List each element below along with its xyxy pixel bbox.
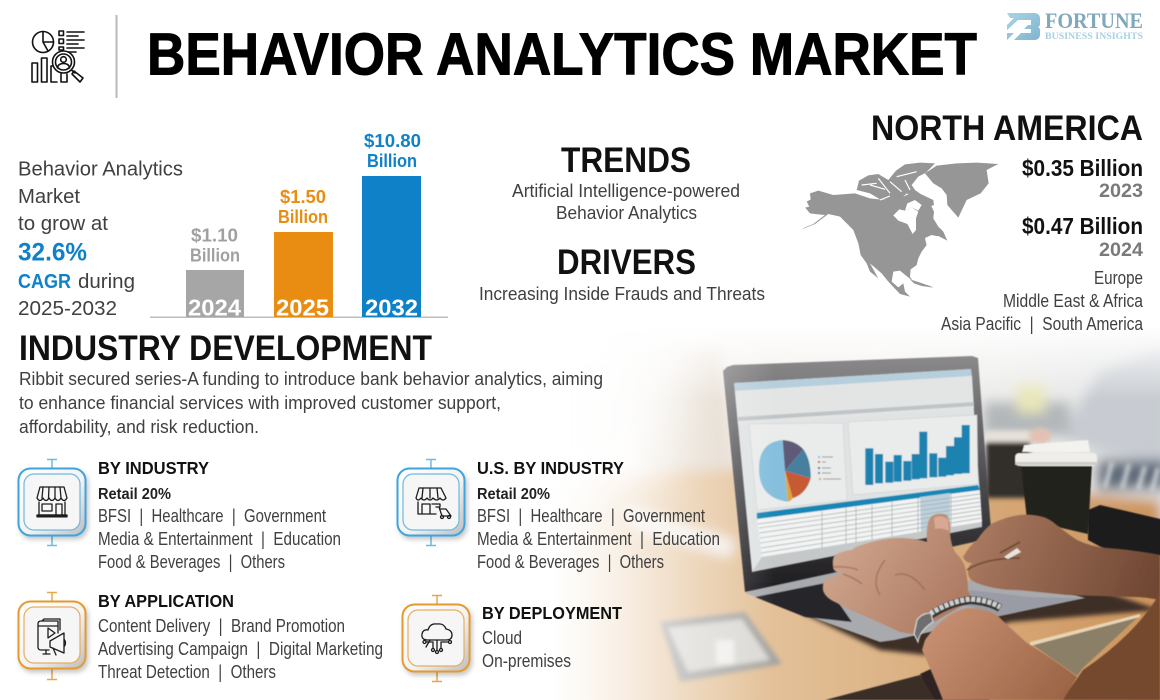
Arctic islands [857, 163, 935, 207]
Cuba [910, 279, 933, 288]
U.S. by industry: U.S. BY INDUSTRY [477, 458, 624, 478]
regional figures: $0.47 Billion [1022, 213, 1143, 239]
map: North America [802, 163, 998, 297]
bar 2024: 2024 [188, 294, 241, 320]
pie legend [818, 456, 841, 480]
by deployment [482, 603, 622, 671]
trends: Behavior Analytics [556, 203, 697, 223]
hands and forearms [823, 514, 1160, 700]
drivers: DRIVERS [557, 243, 696, 282]
trends: Artificial Intelligence-powered [512, 181, 740, 201]
by industry: Media & Entertainment | Education [98, 529, 341, 549]
U.S. by industry: Food & Beverages | Others [477, 552, 664, 572]
dark notebook [1088, 505, 1160, 556]
CAGR text block: Market [18, 185, 80, 208]
regional figures: 2024 [1099, 240, 1143, 261]
white gap in far hand [1004, 548, 1021, 559]
Arctic channels [862, 172, 917, 200]
bar chart: market size [150, 131, 448, 320]
U.S. by industry [477, 458, 720, 572]
CAGR text block [18, 158, 183, 320]
pie chart [759, 440, 811, 502]
Foxe channel [905, 200, 922, 211]
title: BEHAVIOR ANALYTICS MARKET [147, 22, 977, 88]
by deployment: BY DEPLOYMENT [482, 603, 622, 623]
by industry: BY INDUSTRY [98, 458, 209, 478]
header icon: analytics [32, 31, 84, 82]
regional figures: Middle East & Africa [1003, 291, 1144, 311]
by deployment: Cloud [482, 628, 522, 648]
phone on desk [660, 612, 782, 682]
bottom-right forearm [1062, 593, 1160, 700]
laptop screen bezel [723, 356, 992, 592]
logo: Fortune Business Insights [1007, 8, 1143, 42]
Greenland [925, 163, 998, 218]
header divider [116, 15, 118, 98]
by industry [98, 458, 341, 572]
icon: video and megaphone [18, 592, 86, 680]
bar chart [865, 425, 970, 485]
logo: Fortune Business Insights: BUSINESS INSIGHTS [1045, 32, 1143, 42]
back coffee cup [985, 428, 1051, 498]
drivers: Increasing Inside Frauds and Threats [479, 284, 765, 304]
spreadsheet chart panels [749, 423, 847, 510]
bar 2032: $10.80 [364, 131, 421, 151]
regional figures: 2023 [1099, 181, 1143, 202]
bar 2032 [362, 131, 421, 320]
by deployment: On-premises [482, 651, 571, 671]
drivers [479, 243, 765, 304]
CAGR text block: 32.6% [18, 238, 87, 266]
industry development: INDUSTRY DEVELOPMENT [19, 329, 432, 368]
CAGR text block: during [78, 270, 135, 293]
U.S. by industry: Media & Entertainment | Education [477, 529, 720, 549]
left fade [480, 285, 776, 700]
bar 2025: Billion [278, 207, 328, 227]
Hudson Bay [893, 207, 918, 234]
background photo: laptop on desk [480, 285, 1160, 700]
industry development: Ribbit secured series-A funding to introduce bank behavior analytics, aiming [19, 369, 603, 389]
icon: cloud network [402, 596, 470, 682]
desk edge and dark gap [825, 614, 1140, 700]
U.S. by industry: BFSI | Healthcare | Government [477, 506, 705, 526]
CAGR text block: to grow at [18, 212, 108, 235]
wristwatch bracelet [914, 599, 1000, 642]
spreadsheet screen [734, 369, 982, 572]
laptop base and keyboard [745, 553, 1085, 642]
thumbnail [934, 516, 949, 531]
sheet tabs strip [752, 522, 982, 572]
industry development: affordability, and risk reduction. [19, 417, 259, 437]
bar 2025: $1.50 [280, 187, 326, 207]
CAGR text block: CAGR [18, 270, 71, 293]
logo: Fortune Business Insights: FORTUNE [1045, 8, 1143, 33]
mainland [802, 191, 947, 297]
by application: Content Delivery | Brand Promotion [98, 616, 345, 636]
coffee cup [1015, 440, 1097, 534]
laptop shadow on desk [800, 590, 1160, 655]
bar 2025 [274, 187, 333, 320]
bar 2024: $1.10 [191, 226, 238, 246]
by application: Advertising Campaign | Digital Marketing [98, 639, 383, 659]
regional figures: NORTH AMERICA [871, 109, 1143, 148]
bar 2024: Billion [190, 246, 240, 266]
regional figures: $0.35 Billion [1022, 155, 1143, 181]
regional figures: Europe [1094, 268, 1143, 288]
far hand [963, 515, 1160, 600]
bar 2025: 2025 [276, 294, 329, 320]
near hand [823, 514, 972, 634]
U.S. by industry: Retail 20% [477, 486, 550, 503]
industry development [19, 329, 603, 437]
bar 2032: Billion [367, 151, 417, 171]
Alaska white cut [804, 202, 809, 208]
top fade [480, 285, 1160, 403]
by application: Threat Detection | Others [98, 662, 276, 682]
bar 2032: 2032 [365, 294, 418, 320]
by application: BY APPLICATION [98, 591, 234, 611]
icon: shop with cart [398, 460, 464, 546]
icon: storefront [18, 460, 86, 546]
regional figures [871, 109, 1144, 334]
by industry: BFSI | Healthcare | Government [98, 506, 326, 526]
industry development: to enhance financial services with improved customer support, [19, 393, 501, 413]
by application [98, 591, 383, 682]
data table [757, 490, 982, 557]
chair stripes [1105, 462, 1158, 491]
bar 2024 [186, 226, 244, 320]
CAGR text block: Behavior Analytics [18, 158, 183, 180]
CAGR text block: 2025-2032 [18, 297, 117, 320]
by industry: Food & Beverages | Others [98, 552, 285, 572]
blurred cafe background [530, 320, 1160, 700]
by industry: Retail 20% [98, 486, 171, 503]
trends [512, 141, 740, 223]
Gulf of St Lawrence [925, 235, 939, 240]
trends: TRENDS [561, 141, 691, 180]
near forearm [922, 608, 1077, 700]
